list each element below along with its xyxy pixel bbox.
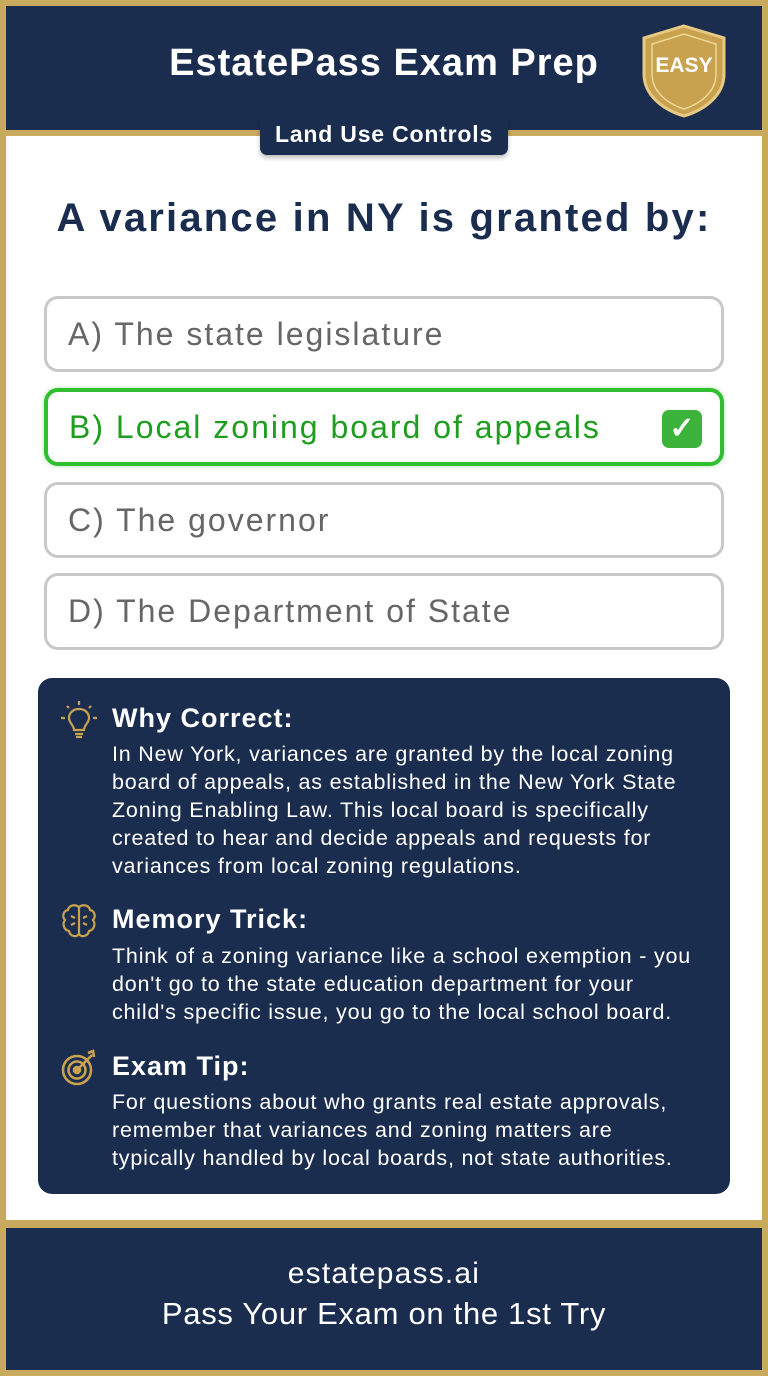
option D: [44, 573, 724, 650]
text: why correct: In New York, variances are granted by the local zoning: [112, 742, 674, 766]
option B (correct): [44, 388, 724, 466]
option A: A) The state legislature: [68, 316, 444, 352]
icon: EASY shield: [642, 24, 726, 118]
icon: check mark: ✓: [669, 412, 695, 445]
text: memory trick: [112, 944, 691, 1024]
option D: D) The Department of State: [68, 593, 512, 629]
text: why correct: [112, 742, 676, 878]
text: exam tip: For questions about who grants real estate approvals,: [112, 1090, 667, 1114]
icon: EASY shield: EASY: [655, 54, 713, 77]
option C: C) The governor: [68, 502, 330, 538]
question: A variance in NY is granted by:: [56, 196, 712, 240]
text: why correct: board of appeals, as established in the New York State: [112, 770, 676, 794]
option B (correct): B) Local zoning board of appeals: [69, 408, 601, 444]
footer: tagline: Pass Your Exam on the 1st Try: [162, 1296, 606, 1331]
text: why correct: created to hear and decide appeals and requests for: [112, 826, 651, 850]
text: why correct: Zoning Enabling Law. This local board is specifically: [112, 798, 649, 822]
footer: site: estatepass.ai: [288, 1257, 480, 1290]
title: EstatePass Exam Prep: [169, 42, 599, 84]
icon: check mark: [662, 410, 702, 448]
icon: brain: [62, 904, 96, 938]
panel: explanation: [38, 678, 730, 1194]
icon: lightbulb: [61, 701, 97, 738]
footer: [6, 1228, 762, 1370]
text: why correct: variances from local zoning regulations.: [112, 854, 522, 878]
text: exam tip: [112, 1090, 673, 1170]
text: exam tip: typically handled by local boards, not state authorities.: [112, 1146, 673, 1170]
heading: memory trick: Memory Trick:: [112, 904, 308, 934]
option C: [44, 482, 724, 558]
heading: why correct: Why Correct:: [112, 703, 294, 733]
icon: target: [62, 1049, 96, 1086]
header: [6, 6, 762, 130]
content area: [6, 136, 762, 1220]
text: memory trick: don't go to the state education department for your: [112, 972, 634, 996]
text: exam tip: remember that variances and zoning matters are: [112, 1118, 612, 1142]
heading: exam tip: Exam Tip:: [112, 1051, 250, 1081]
text: memory trick: child's specific issue, you go to the local school board.: [112, 1000, 672, 1024]
option A: [44, 296, 724, 372]
badge: Land Use Controls: Land Use Controls: [275, 121, 493, 147]
badge: Land Use Controls: [260, 114, 508, 155]
text: memory trick: Think of a zoning variance like a school exemption - you: [112, 944, 691, 968]
